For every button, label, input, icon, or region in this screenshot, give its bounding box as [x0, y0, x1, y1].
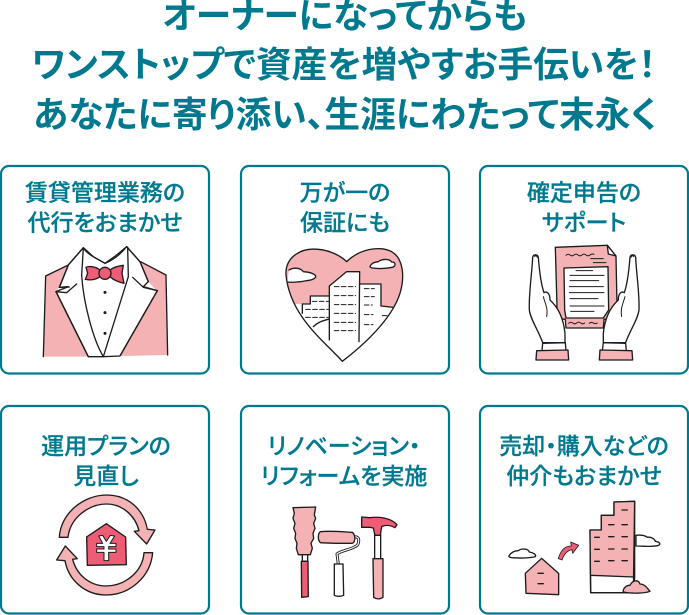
cuffs [542, 343, 626, 351]
house [525, 558, 559, 595]
icon: tuxedo [43, 247, 168, 357]
hammer [362, 517, 397, 599]
building [590, 501, 650, 593]
heading: 確定申告のサポート [527, 180, 641, 236]
cloud left [509, 549, 536, 558]
panel: 運用プランの見直し [1, 406, 209, 614]
heading: 万が一の保証にも: 保証にも [300, 210, 390, 236]
heading: 万が一の保証にも [300, 180, 390, 236]
heading: 売却・購入などの仲介もおまかせ: 売却・購入などの [499, 433, 669, 459]
cloud right [636, 535, 660, 546]
icon: house to building [509, 501, 660, 595]
roller [318, 531, 359, 596]
document [555, 245, 617, 328]
arrow [558, 542, 579, 560]
heading: 確定申告のサポート: サポート [542, 210, 626, 236]
heading: 確定申告のサポート: 確定申告の [527, 180, 641, 206]
scraper [293, 507, 316, 597]
title [32, 0, 657, 135]
icon: renovation tools [293, 507, 397, 599]
heading: リノベーション・リフォームを実施: リフォームを実施 [261, 463, 427, 489]
heading: リノベーション・リフォームを実施 [261, 433, 427, 489]
heading: 賃貸管理業務の代行をおまかせ: 代行をおまかせ [28, 210, 182, 236]
heading: 万が一の保証にも: 万が一の [300, 180, 390, 206]
panel: リノベーション・リフォームを実施 [241, 406, 449, 614]
panel: 確定申告のサポート [480, 166, 688, 374]
bush [623, 581, 650, 593]
heading: 売却・購入などの仲介もおまかせ: 仲介もおまかせ [506, 463, 662, 489]
left hand [529, 255, 565, 343]
heading: 賃貸管理業務の代行をおまかせ: 賃貸管理業務の [25, 180, 185, 206]
panel: 万が一の保証にも [241, 166, 449, 374]
heading: 運用プランの見直し: 運用プランの [41, 433, 171, 459]
icon: cycle arrows with yen house [57, 495, 155, 595]
heading: 売却・購入などの仲介もおまかせ [499, 433, 669, 489]
icon: hands holding document [529, 245, 639, 360]
heading: リノベーション・リフォームを実施: リノベーション・ [268, 433, 420, 459]
icon: heart with buildings [282, 249, 403, 367]
heading: 運用プランの見直し: 見直し [73, 463, 139, 489]
heading: 運用プランの見直し [41, 433, 171, 489]
heading: 賃貸管理業務の代行をおまかせ [25, 180, 185, 236]
panel: 賃貸管理業務の代行をおまかせ [1, 166, 209, 374]
right hand [603, 255, 639, 343]
title: ワンストップで資産を増やすお手伝いを！ [32, 45, 656, 85]
panel: 売却・購入などの仲介もおまかせ [480, 406, 688, 614]
title: あなたに寄り添い、生涯にわたって末永く [33, 95, 657, 135]
